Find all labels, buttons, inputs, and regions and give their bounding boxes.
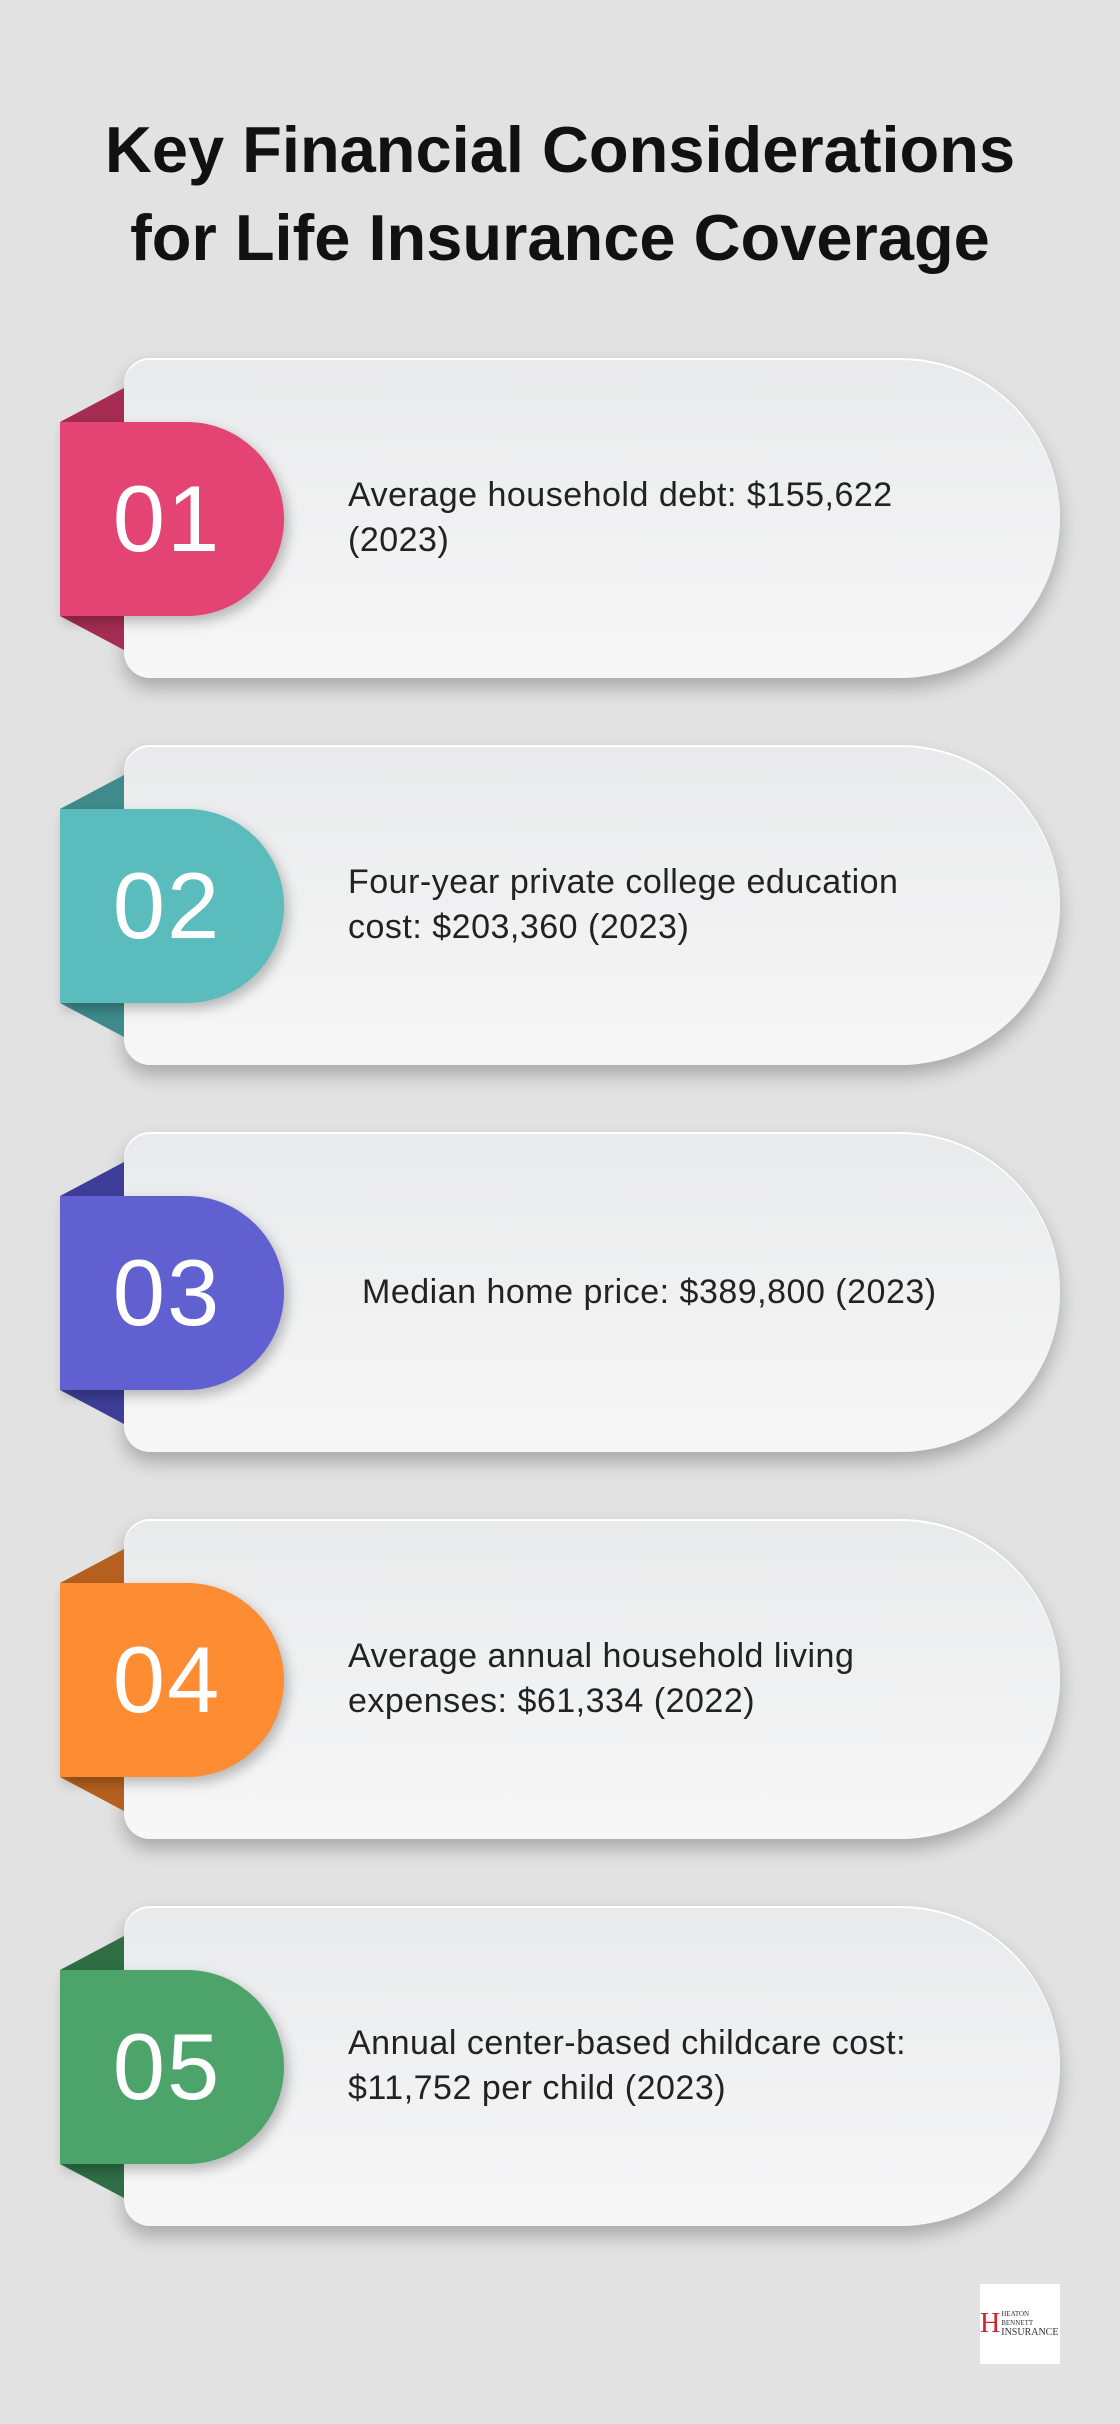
number tab 04: 04 bbox=[113, 1627, 221, 1732]
number tab 05: 05 bbox=[113, 2014, 221, 2119]
panel: item 05 bbox=[58, 1906, 1069, 2245]
card background bbox=[124, 1519, 1060, 1839]
card background bbox=[124, 745, 1060, 1065]
text: college cost: Four-year private college education bbox=[348, 863, 898, 901]
title: for Life Insurance Coverage bbox=[130, 201, 990, 274]
text: childcare cost: Annual center-based childcare cost: bbox=[348, 2024, 906, 2062]
panel: item 02 bbox=[58, 745, 1069, 1084]
number tab 03: 03 bbox=[113, 1240, 221, 1345]
number tab 01 bbox=[60, 422, 284, 616]
logo: HEATON BENNETT bbox=[1001, 2310, 1033, 2327]
fold: bottom bbox=[60, 1777, 124, 1811]
number tab 05 bbox=[60, 1970, 284, 2164]
fold: bottom bbox=[60, 1003, 124, 1037]
fold: bottom bbox=[60, 2164, 124, 2198]
text: living expenses bbox=[348, 1637, 854, 1720]
title bbox=[105, 113, 1015, 274]
card background bbox=[124, 1906, 1060, 2226]
fold: top bbox=[60, 388, 124, 422]
fold: top bbox=[60, 1162, 124, 1196]
fold: top bbox=[60, 775, 124, 809]
text: college cost: cost: $203,360 (2023) bbox=[348, 908, 689, 946]
logo bbox=[980, 2284, 1060, 2364]
text: college cost bbox=[348, 863, 898, 946]
number tab 02 bbox=[60, 809, 284, 1003]
text: living expenses: expenses: $61,334 (2022) bbox=[348, 1682, 755, 1720]
fold: top bbox=[60, 1549, 124, 1583]
card background bbox=[124, 1132, 1060, 1452]
title: Key Financial Considerations bbox=[105, 113, 1015, 186]
panel: item 04 bbox=[58, 1519, 1069, 1858]
number tab 03 bbox=[60, 1196, 284, 1390]
logo: H bbox=[980, 2308, 1000, 2339]
fold: bottom bbox=[60, 1390, 124, 1424]
fold: bottom bbox=[60, 616, 124, 650]
text: living expenses: Average annual household living bbox=[348, 1637, 854, 1675]
text: household debt bbox=[348, 476, 893, 559]
number tab 04 bbox=[60, 1583, 284, 1777]
panel: item 03 bbox=[58, 1132, 1069, 1471]
fold: top bbox=[60, 1936, 124, 1970]
panel: item 01 bbox=[58, 358, 1069, 697]
card background bbox=[124, 358, 1060, 678]
text: household debt: Average household debt: $155,622 bbox=[348, 476, 893, 514]
text: childcare cost bbox=[348, 2024, 906, 2107]
text: home price: Median home price: $389,800 (2023) bbox=[362, 1272, 937, 1310]
number tab 01: 01 bbox=[113, 466, 221, 571]
text: household debt: (2023) bbox=[348, 521, 449, 559]
logo: INSURANCE bbox=[1001, 2327, 1058, 2338]
text: childcare cost: $11,752 per child (2023) bbox=[348, 2069, 726, 2107]
number tab 02: 02 bbox=[113, 853, 221, 958]
